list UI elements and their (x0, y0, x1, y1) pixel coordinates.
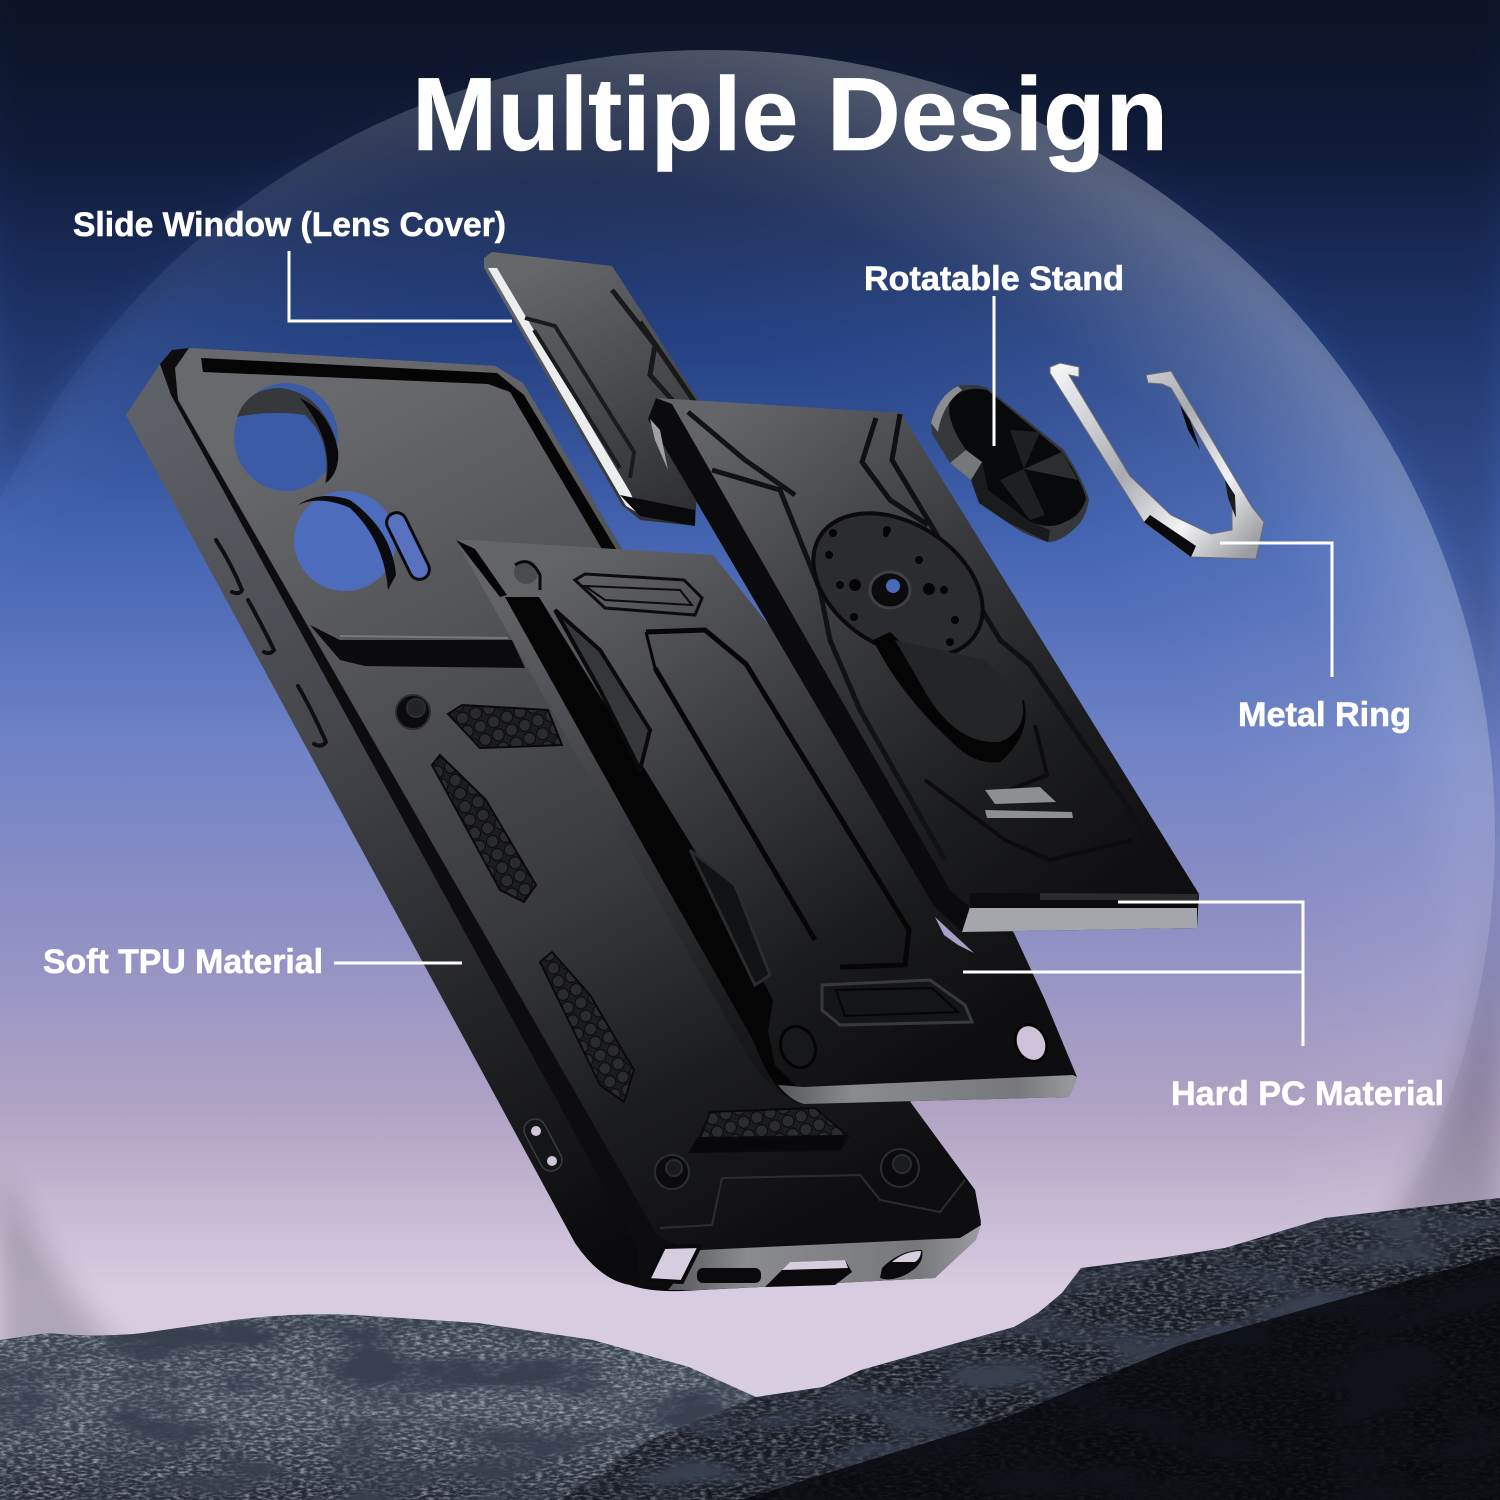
rotatable stand disc (931, 385, 1089, 542)
side holes (520, 1115, 566, 1175)
label: slide window (73, 206, 512, 321)
bottom lip and ports (648, 1225, 981, 1290)
title: Multiple Design (412, 57, 1168, 173)
metal ring (1050, 363, 1264, 559)
label: soft TPU: Soft TPU Material (43, 943, 323, 981)
label: rotatable stand: Rotatable Stand (864, 260, 1124, 298)
rocks right (560, 1198, 1500, 1500)
side buttons (216, 540, 326, 746)
slide window lens cover (484, 252, 702, 526)
stand back plate (648, 398, 1199, 932)
case camera holes (234, 383, 433, 591)
case posts (396, 695, 919, 1189)
stand mount disc (787, 484, 1073, 818)
label: slide window: Slide Window (Lens Cover) (73, 206, 506, 244)
label: hard PC (963, 902, 1444, 1113)
label: hard PC: Hard PC Material (1171, 1075, 1444, 1113)
speaker cut-out (660, 1175, 965, 1228)
label: metal ring (1220, 543, 1411, 734)
hard PC shell (456, 540, 1077, 1104)
soft TPU case (126, 348, 981, 1291)
label: metal ring: Metal Ring (1238, 696, 1411, 734)
camera plateau step (310, 625, 525, 668)
honeycomb pads (432, 705, 848, 1152)
rocks left (0, 1314, 756, 1500)
